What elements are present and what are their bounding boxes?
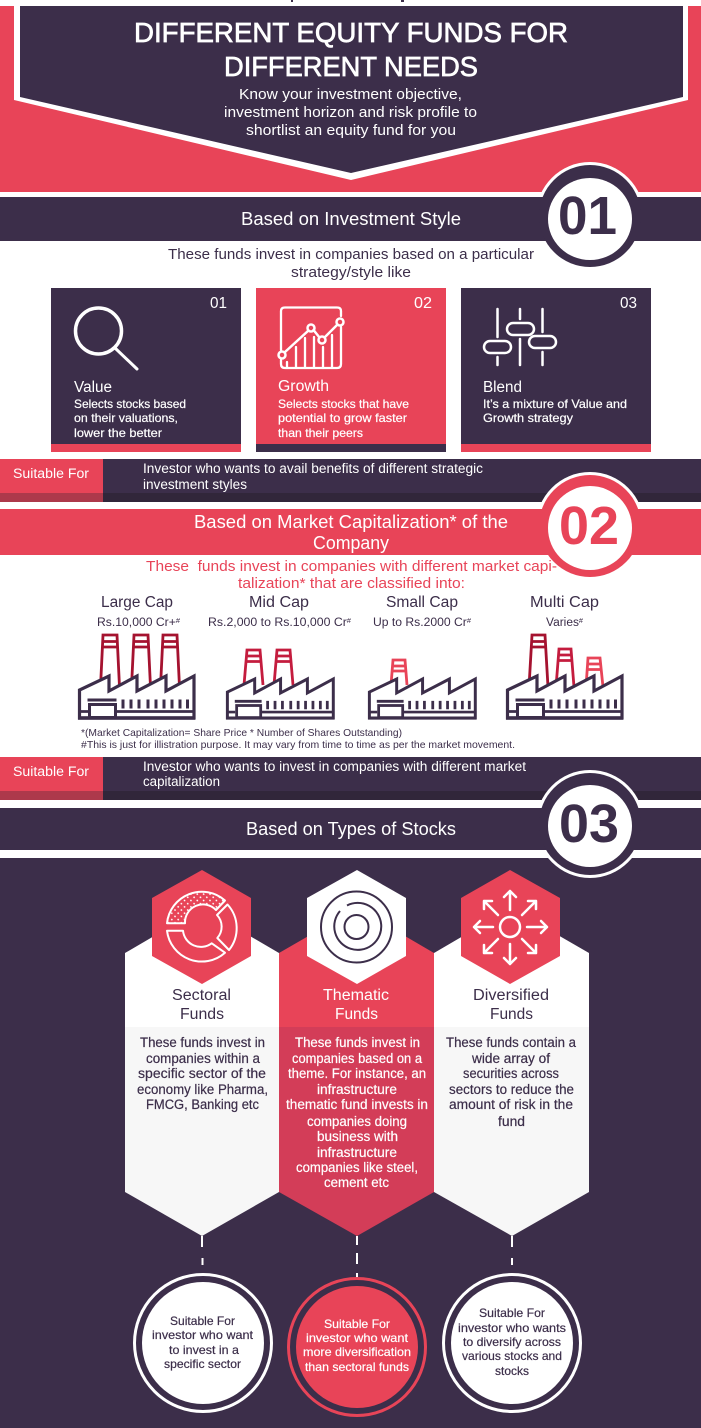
icon: sliders <box>484 309 556 365</box>
panel: diversified funds: amount of risk in the <box>449 1097 573 1112</box>
footnotes: #This is just for illistration purpose. It may vary from time to time as per the market movement. <box>81 739 515 751</box>
banner: title chevron <box>14 6 688 180</box>
panel: growth: than their peers <box>278 426 363 440</box>
icon: small factory <box>368 660 476 718</box>
panel: thematic funds: companies like steel, <box>296 1160 418 1175</box>
section 1 number badge: 01 <box>558 186 617 246</box>
callout: diversified suitable for <box>444 1274 580 1412</box>
icon: mid factory <box>226 650 334 718</box>
section 1 heading: Based on Investment Style <box>241 209 461 229</box>
footnotes <box>81 727 515 751</box>
panel: blend <box>461 288 651 452</box>
panel: diversified funds: securities across <box>463 1066 559 1081</box>
panel: diversified funds: Diversified <box>473 987 549 1004</box>
section 2 badge halo <box>536 472 644 580</box>
callout: diversified suitable for: stocks <box>495 1364 529 1378</box>
section 2 heading <box>194 512 508 553</box>
suitable-for bar 2: capitalization <box>143 774 220 789</box>
connector: sectoral dashes <box>201 1236 204 1265</box>
callout: thematic suitable for: than sectoral funds <box>305 1360 409 1374</box>
panel: thematic funds: thematic fund invests in <box>286 1097 428 1112</box>
section 3 number badge: 03 <box>559 794 619 854</box>
panel: value <box>51 288 241 452</box>
panel: sectoral funds: economy like Pharma, <box>137 1082 268 1097</box>
panel: thematic funds: Funds <box>335 1006 378 1023</box>
section 2 heading: Based on Market Capitalization* of the <box>194 512 508 532</box>
panel: growth: 02 <box>414 295 432 312</box>
title <box>134 17 568 82</box>
section 2 band <box>0 509 701 555</box>
callout: sectoral suitable for: specific sector <box>164 1357 241 1371</box>
subtitle <box>224 86 477 139</box>
suitable-for bar 2: Suitable For <box>13 764 90 779</box>
connector: diversified dashes <box>511 1236 513 1265</box>
callout: thematic suitable for: Suitable For <box>324 1317 390 1331</box>
panel: sectoral funds: specific sector of the <box>138 1066 266 1081</box>
panel: sectoral funds: These funds invest in <box>140 1035 265 1050</box>
connector: thematic dashes <box>356 1236 358 1277</box>
market cap: large <box>78 594 195 718</box>
market cap: multi: Varies <box>546 617 578 629</box>
section 3 number badge <box>539 773 641 875</box>
market cap: multi: Multi Cap <box>530 594 599 611</box>
market cap: small: Up to Rs.2000 Cr <box>373 617 462 629</box>
market cap: mid: Rs.2,000 to Rs.10,000 Cr <box>208 617 338 629</box>
panel: sectoral funds: companies within a <box>146 1051 260 1066</box>
section 2 intro text: talization* that are classified into: <box>238 575 465 592</box>
market cap: multi: # <box>579 618 583 625</box>
market cap: small: # <box>467 618 471 625</box>
market cap: mid <box>208 594 351 718</box>
panel: thematic funds: infrastructure <box>317 1145 397 1160</box>
panel: thematic funds: Thematic <box>323 987 389 1004</box>
market cap: mid: # <box>347 618 351 625</box>
panel: value: lower the better <box>74 426 162 440</box>
panel: blend: 03 <box>620 295 637 312</box>
panel: blend: Growth strategy <box>483 411 573 425</box>
panel: thematic funds: These funds invest in <box>295 1035 420 1050</box>
panel: sectoral funds <box>125 870 279 1236</box>
icon: sectoral hexagon <box>152 870 251 984</box>
panel: growth <box>256 288 446 452</box>
panel: thematic funds: companies doing <box>307 1114 407 1129</box>
panel: thematic funds: cement etc <box>324 1175 389 1190</box>
section 1 intro text <box>168 246 534 281</box>
panel: thematic funds: theme. For instance, an <box>288 1066 426 1081</box>
callout: sectoral suitable for: Suitable For <box>170 1314 235 1328</box>
market cap: small <box>368 594 476 718</box>
suitable-for bar 2: Investor who wants to invest in companies with different market <box>143 759 526 774</box>
callout: diversified suitable for: investor who wants <box>458 1321 566 1335</box>
title: DIFFERENT NEEDS <box>224 51 478 82</box>
panel: diversified funds: sectors to reduce the <box>449 1082 574 1097</box>
subtitle: shortlist an equity fund for you <box>246 122 456 139</box>
panel: thematic funds: business with <box>317 1129 398 1144</box>
panel: diversified funds: Funds <box>490 1006 533 1023</box>
suitable-for bar 1 <box>0 459 701 502</box>
icon: thematic hexagon <box>307 870 406 984</box>
suitable-for bar 1: Investor who wants to avail benefits of different strategic <box>143 461 483 476</box>
panel: diversified funds: fund <box>498 1114 525 1129</box>
panel: thematic funds <box>279 870 434 1236</box>
suitable-for bar 2 <box>0 757 701 800</box>
market cap: large: Rs.10,000 Cr+ <box>97 617 171 629</box>
section 3 background <box>0 858 701 1428</box>
callout: sectoral suitable for: to invest in a <box>169 1343 239 1357</box>
panel: blend: Blend <box>483 379 522 396</box>
panel: blend: It’s a mixture of Value and <box>483 397 627 411</box>
market cap: mid: Mid Cap <box>249 594 309 611</box>
section 3 heading: Based on Types of Stocks <box>246 819 456 839</box>
callout: diversified suitable for: Suitable For <box>479 1306 545 1320</box>
panel: diversified funds <box>434 870 589 1236</box>
section 2 number badge <box>539 475 641 577</box>
icon: multi factory <box>506 635 623 718</box>
suitable-for bar 1: investment styles <box>143 477 247 492</box>
market cap: large: Large Cap <box>101 594 173 611</box>
icon: magnifier <box>76 308 137 369</box>
section 3 badge halo <box>536 770 644 878</box>
panel: sectoral funds: Funds <box>180 1006 224 1023</box>
callout: diversified suitable for: various stocks and <box>462 1349 562 1363</box>
callout: thematic suitable for <box>288 1278 426 1416</box>
callout: sectoral suitable for: investor who want <box>152 1328 254 1342</box>
panel: value: Value <box>74 379 112 396</box>
subtitle: Know your investment objective, <box>239 86 462 103</box>
market cap: small: Small Cap <box>386 594 458 611</box>
panel: thematic funds: companies based on a <box>292 1051 422 1066</box>
panel: value: 01 <box>210 295 227 312</box>
callout: thematic suitable for: investor who want <box>306 1331 409 1345</box>
section 1 intro text: These funds invest in companies based on a particular <box>168 246 534 263</box>
subtitle: investment horizon and risk profile to <box>224 104 477 121</box>
panel: value: on their valuations, <box>74 411 178 425</box>
icon: diversified hexagon <box>461 870 560 984</box>
section 2 heading: Company <box>313 533 389 553</box>
section 1 band <box>0 197 701 241</box>
panel: sectoral funds: FMCG, Banking etc <box>146 1097 259 1112</box>
callout: thematic suitable for: more diversification <box>303 1345 411 1359</box>
top red background <box>0 6 701 192</box>
panel: growth: Growth <box>278 378 329 395</box>
section 2 number badge: 02 <box>559 496 619 556</box>
section 2 intro text: These funds invest in companies with different market capi- <box>146 558 557 575</box>
market cap: large: # <box>176 618 180 625</box>
top page fragment <box>291 0 404 2</box>
section 2 intro text <box>146 558 557 592</box>
panel: growth: potential to grow faster <box>278 411 407 425</box>
section 3 band <box>0 808 701 850</box>
callout: diversified suitable for: to diversify across <box>463 1335 561 1349</box>
title: DIFFERENT EQUITY FUNDS FOR <box>134 17 568 48</box>
footnotes: *(Market Capitalization= Share Price * Number of Shares Outstanding) <box>81 727 402 739</box>
panel: sectoral funds: Sectoral <box>172 987 231 1004</box>
callout: sectoral suitable for <box>134 1274 272 1412</box>
market cap: multi <box>506 594 623 718</box>
panel: value: Selects stocks based <box>74 397 186 411</box>
suitable-for bar 1: Suitable For <box>13 466 90 481</box>
section 1 number badge <box>539 165 641 267</box>
icon: large factory <box>78 635 195 718</box>
section 1 intro text: strategy/style like <box>291 264 411 281</box>
panel: thematic funds: infrastructure <box>317 1082 397 1097</box>
icon: growth chart <box>278 308 344 368</box>
section 1 badge halo <box>536 162 644 270</box>
panel: diversified funds: These funds contain a <box>446 1035 576 1050</box>
panel: diversified funds: wide array of <box>471 1051 550 1066</box>
panel: growth: Selects stocks that have <box>278 397 409 411</box>
